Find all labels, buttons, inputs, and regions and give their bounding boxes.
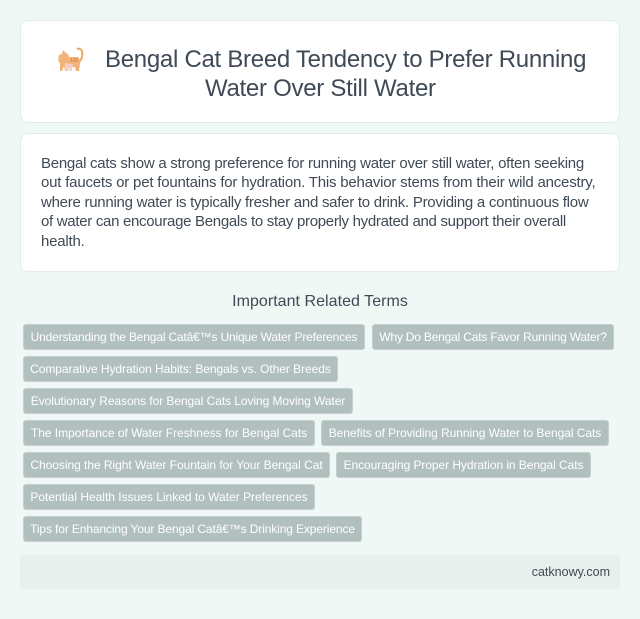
- footer site name: catknowy.com: [532, 565, 610, 579]
- tag: [23, 516, 362, 542]
- description text: where running water is typically fresher and safer to drink. Providing a continuous flow: [41, 194, 588, 211]
- tag list: [23, 324, 614, 542]
- description text: out faucets or pet fountains for hydration. This behavior stems from their wild ancestry,: [41, 174, 595, 191]
- tag: [23, 388, 353, 414]
- tag: Tips for Enhancing Your Bengal Catâ€™s Drinking Experience: [30, 522, 355, 536]
- tag: Understanding the Bengal Catâ€™s Unique Water Preferences: [31, 330, 357, 344]
- tag: Potential Health Issues Linked to Water Preferences: [30, 490, 308, 504]
- description text: of water can encourage Bengals to stay properly hydrated and support their overall: [41, 213, 566, 230]
- description text: [41, 155, 595, 250]
- tag: Evolutionary Reasons for Bengal Cats Loving Moving Water: [31, 394, 345, 408]
- title line 1: Bengal Cat Breed Tendency to Prefer Running: [105, 46, 586, 73]
- tag: [23, 356, 338, 382]
- description text: Bengal cats show a strong preference for running water over still water, often seeking: [41, 155, 584, 172]
- title line 2: Water Over Still Water: [205, 75, 436, 102]
- panel: title card: [20, 20, 620, 123]
- tag: Encouraging Proper Hydration in Bengal Cats: [344, 458, 583, 472]
- tag: [321, 420, 609, 446]
- tag: [336, 452, 591, 478]
- description text: health.: [41, 233, 85, 250]
- tag: Comparative Hydration Habits: Bengals vs. Other Breeds: [30, 362, 331, 376]
- footer bar: [20, 555, 620, 589]
- icon: cat: [58, 48, 84, 71]
- heading: related terms: Important Related Terms: [232, 293, 408, 310]
- panel: description card: [20, 133, 620, 272]
- tag: The Importance of Water Freshness for Bengal Cats: [31, 426, 307, 440]
- tag: Choosing the Right Water Fountain for Your Bengal Cat: [30, 458, 323, 472]
- tag: [23, 420, 315, 446]
- tag: [23, 484, 315, 510]
- tag: [23, 324, 365, 350]
- tag: [372, 324, 614, 350]
- tag: [23, 452, 330, 478]
- tag: Benefits of Providing Running Water to Bengal Cats: [329, 426, 601, 440]
- tag: Why Do Bengal Cats Favor Running Water?: [379, 330, 607, 344]
